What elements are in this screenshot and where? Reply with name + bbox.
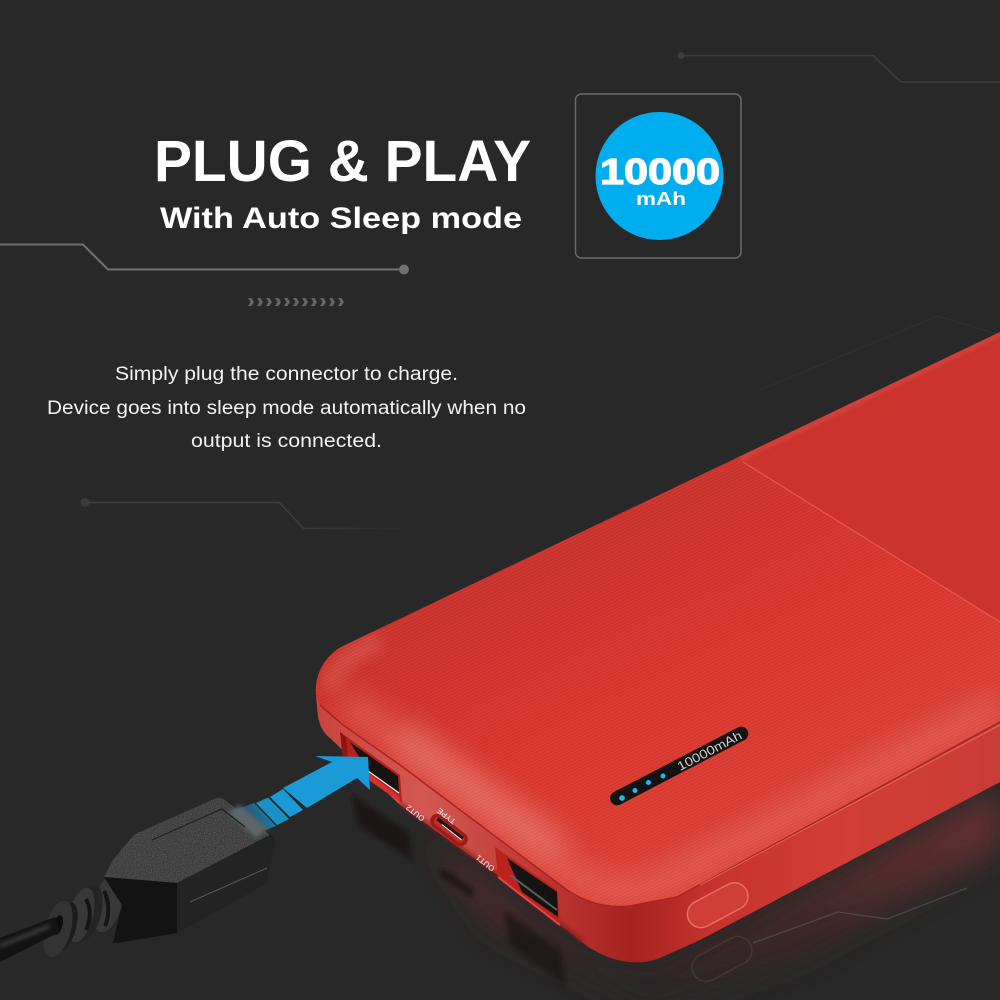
USB cable plug — [0, 798, 275, 962]
reflected circuit line — [753, 888, 967, 943]
face shading — [316, 332, 1000, 906]
port labels — [404, 803, 497, 873]
indicator pill — [608, 724, 751, 808]
USB-C port — [427, 811, 471, 849]
body side — [316, 695, 1000, 962]
circuit line: lower left — [80, 498, 405, 528]
USB port left — [340, 732, 402, 803]
capacity badge: mAh — [636, 189, 686, 209]
cable — [0, 917, 60, 962]
description text: output is connected. — [191, 431, 382, 452]
port labels: OUT1 — [474, 853, 497, 873]
plug top face — [104, 798, 270, 883]
circuit line: left under heading — [0, 244, 409, 274]
face edge highlight — [320, 705, 1000, 906]
power button — [683, 878, 753, 932]
chevron divider — [248, 298, 344, 306]
strain relief rings — [38, 870, 129, 960]
plug lower side — [104, 877, 177, 943]
description text — [47, 364, 526, 452]
description text: Device goes into sleep mode automatically when no — [47, 398, 526, 419]
capacity badge: 10000 — [600, 151, 720, 192]
insertion arrow — [238, 756, 370, 831]
seam — [743, 462, 1000, 622]
heading — [154, 129, 531, 235]
plug silhouette — [104, 798, 275, 943]
USB port right — [495, 847, 560, 925]
product reflection — [352, 790, 1000, 1000]
circuit line: top right — [678, 52, 1000, 82]
top face — [316, 332, 1000, 906]
port labels: TYPE — [435, 806, 457, 826]
title: PLUG & PLAY — [154, 129, 531, 194]
capacity badge — [576, 94, 741, 258]
subtitle: With Auto Sleep mode — [160, 202, 522, 235]
indicator LEDs — [619, 774, 666, 801]
indicator pill: 10000mAh — [675, 728, 744, 774]
circuit line: faint behind product — [760, 316, 1000, 390]
power bank — [316, 332, 1000, 962]
port labels: OUT2 — [404, 803, 427, 823]
description text: Simply plug the connector to charge. — [115, 364, 458, 385]
